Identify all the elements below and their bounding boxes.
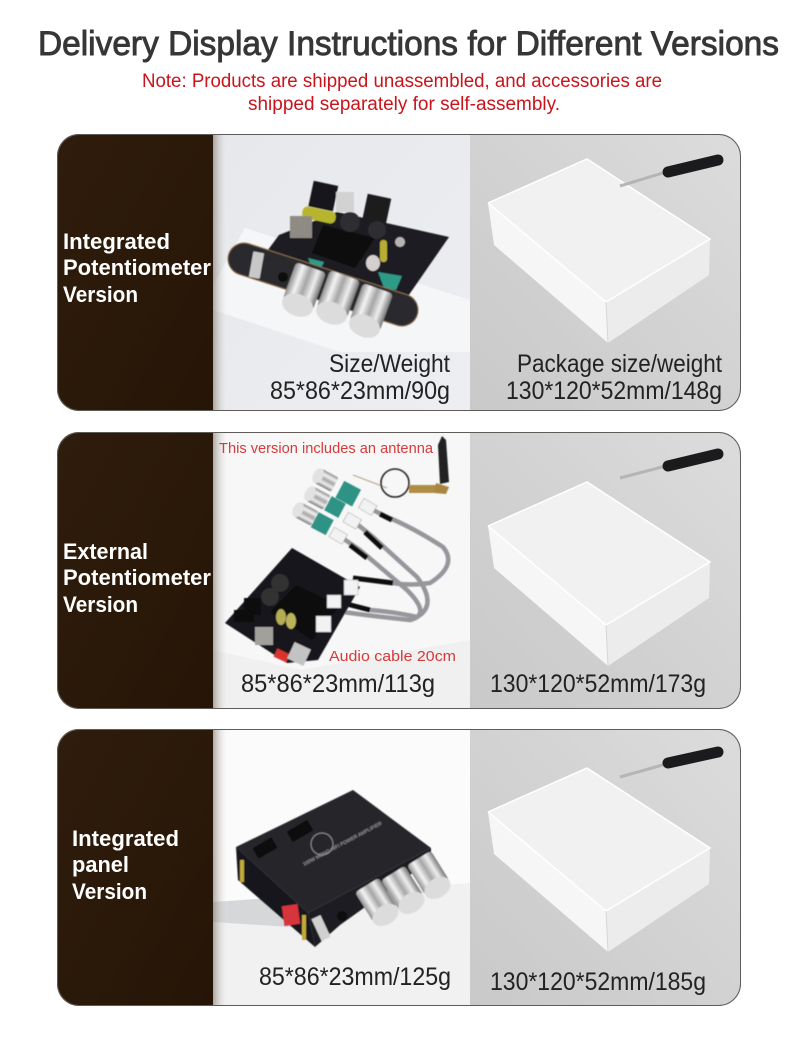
title: Delivery Display Instructions for Different Versions	[38, 25, 779, 63]
label: integrated potentiometer version	[63, 229, 211, 307]
size and weight text: 85*86*23mm/125g	[259, 963, 451, 991]
product: enclosed amplifier with knobs	[236, 790, 455, 947]
label: integrated potentiometer version: Integrated	[63, 229, 170, 254]
package size and weight text: Package size/weight	[517, 350, 722, 378]
product: packing carton with screwdriver	[488, 454, 718, 666]
package size and weight text: 130*120*52mm/173g	[490, 670, 706, 698]
label: external potentiometer version: Potentiometer	[63, 565, 211, 590]
product: board, external potentiometers, cables and antenna	[225, 436, 449, 666]
label: integrated panel version	[72, 826, 179, 904]
product: enclosed amplifier with knobs: 100W MONO HIFI POWER AMPLIFIER	[302, 821, 384, 868]
antenna callout: This version includes an antenna	[219, 440, 434, 457]
product: packing carton with screwdriver	[488, 159, 718, 343]
panel: integrated potentiometer version	[57, 134, 741, 411]
size and weight text: 85*86*23mm/90g	[270, 377, 450, 405]
note text	[142, 71, 662, 115]
size and weight text: 85*86*23mm/113g	[241, 670, 435, 698]
label: integrated potentiometer version: Version	[63, 282, 138, 307]
label: external potentiometer version	[63, 539, 211, 617]
package size and weight text: 130*120*52mm/148g	[506, 377, 722, 405]
label: integrated panel version: Integrated	[72, 826, 179, 851]
panel: external potentiometer version	[57, 432, 741, 709]
size and weight text: Size/Weight	[329, 350, 450, 378]
package size and weight text: 130*120*52mm/185g	[490, 968, 706, 996]
label: external potentiometer version: Version	[63, 592, 138, 617]
label: external potentiometer version: External	[63, 539, 148, 564]
note text: Note: Products are shipped unassembled, and accessories are	[142, 71, 662, 92]
label: integrated panel version: panel	[72, 852, 129, 877]
note text: shipped separately for self-assembly.	[248, 94, 560, 115]
audio cable callout: Audio cable 20cm	[329, 648, 456, 665]
size and weight text	[270, 350, 450, 405]
product: amplifier board with front plate	[244, 181, 449, 342]
product: packing carton with screwdriver	[488, 752, 718, 952]
package size and weight text	[506, 350, 722, 405]
label: integrated potentiometer version: Potentiometer	[63, 255, 211, 280]
panel: integrated panel version	[57, 729, 741, 1006]
label: integrated panel version: Version	[72, 879, 147, 904]
